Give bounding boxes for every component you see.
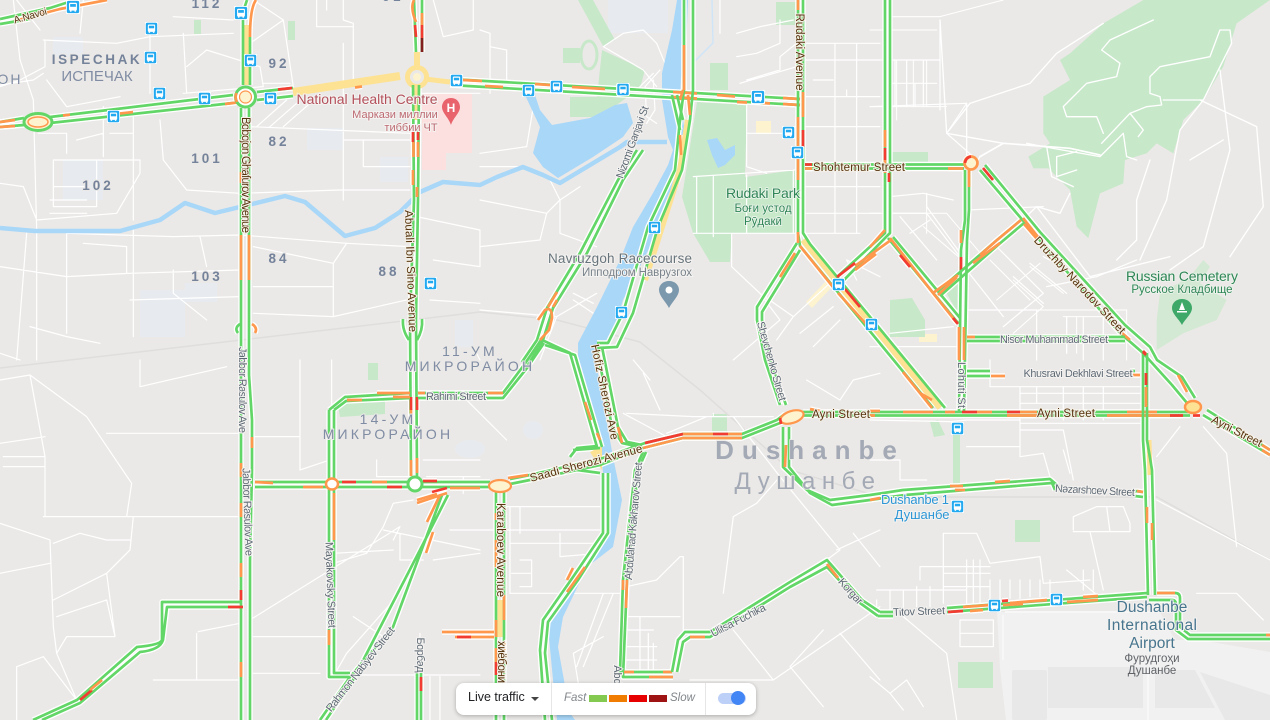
district labels: 11-УМ [442,343,498,359]
river Dushanbinka [548,0,688,720]
road: Hofiz river drive [597,0,693,348]
district labels [0,0,535,442]
road: cross diagonal [933,220,1024,296]
road: Jabbor Rasulov and Bobojon Ghafurov Avenue [236,0,256,720]
road name labels: Ayni Street [1037,408,1096,420]
district labels: МИКРОРАЙОН [323,425,453,442]
traffic mode dropdown: Live traffic [468,690,525,704]
road name labels: Korgar [835,576,865,607]
bus stop icons [66,0,1063,612]
road name labels: хиёбони [495,641,507,683]
road: central east-west arterial [450,79,800,105]
road: Abuali Ibn Sino Avenue [403,0,422,476]
district labels: МИКРОРАЙОН [405,357,535,374]
parks [194,0,1040,688]
road name labels: Abdulahad Kakharov Street [623,462,645,580]
road name labels: Titov Street [893,605,945,619]
road: Rahmon Nabiyev and ramp [320,488,448,720]
road name labels: Shevchenko Street [754,320,788,402]
point of interest: Dushanbe International Airport: Фурудгоҳи [1124,653,1180,665]
road: south-west link [33,602,243,720]
road name labels: Ayni Street [1209,414,1264,450]
point of interest: Rudaki Park: Rudaki Park [726,185,801,201]
road: Karaboev Avenue [496,492,504,720]
minor streets south-west [0,360,480,720]
road name labels: Ulitsa Fuchika [709,602,769,640]
point of interest: Dushanbe International Airport [1107,599,1197,677]
stadium track [581,41,597,69]
road name labels: Rahimi Street [426,391,486,403]
road name labels: Karaboev Avenue [494,503,506,597]
side stream [693,0,713,63]
road: Nizomi Ganjavi and Hofiz Sherozi [522,150,643,473]
traffic speed legend [552,683,706,715]
canal [0,142,667,236]
road: horizontal west of Saadi [255,481,490,488]
point of interest: Rudaki Park: Рӯдакӣ [744,216,782,228]
road: Shohtemur Street [805,164,964,168]
road: Nazarshoev Street [783,427,1143,505]
district labels: ISPECHAK [52,52,142,67]
point of interest: Navruzgoh Racecourse: Ипподром Наврузгох [582,267,692,279]
road: Abdulahad Kakharov Street [620,452,673,677]
district labels: 82 [268,134,290,149]
road name labels: Rahmon Nabiyev Street [324,625,398,714]
minor streets south-centre [450,360,880,707]
road name labels: Ayni Street [812,409,871,421]
point of interest: National Health Centre: Маркази миллии [352,109,438,121]
road name labels: Abuali Ibn Sino Avenue [402,210,418,332]
city label: Душанбе [735,468,881,495]
road: western arterial [0,86,362,130]
road: Rudaki Avenue [757,0,945,408]
road: Saadi Sherozi Avenue [508,414,787,484]
road name labels: Khusravi Dekhlavi Street [1024,368,1132,380]
traffic mode dropdown [456,683,552,715]
point of interest: Dushanbe International Airport: Dushanbe [1117,599,1187,616]
road: Ayni Street [803,409,1270,455]
road: Nisor Muhammad and Khusravi Dekhlavi [967,337,1140,376]
minor streets north-centre [480,0,880,360]
road name labels: Nazarshoev Street [1055,483,1135,499]
district labels: 84 [268,251,290,266]
road name labels: Mayakovsky Street [323,542,337,628]
railway [0,312,1270,560]
district labels: 14-УМ [360,411,416,427]
road: river west bank [540,473,608,720]
traffic toggle switch [718,693,746,704]
built-up patches [53,0,668,458]
live traffic control panel [456,683,756,715]
point of interest: Russian Cemetery: Russian Cemetery [1126,268,1238,284]
roundabouts [326,156,1201,492]
road name labels: Lohuti St [955,362,967,408]
pale yellow blocks [756,121,937,342]
hospital grounds [422,93,472,170]
road: Titov Street [878,593,1147,616]
point of interest: Dushanbe International Airport: International [1107,617,1197,634]
city label: Dushanbe [715,435,905,465]
road: Borbad south [417,632,494,720]
district labels: 102 [82,178,114,193]
minor streets north-west [0,0,480,360]
district labels: ИСПЕЧАК [61,68,133,85]
road name labels: Abd [611,665,623,685]
district labels: 103 [191,269,223,284]
road: Lohuti Street [959,170,969,412]
point of interest: National Health Centre: National Health Centre [296,91,438,107]
road: eastern vertical to airport [1143,352,1270,639]
point of interest: Russian Cemetery: Русское Кладбище [1131,284,1233,296]
road name labels: Nisor Muhammad Street [1000,334,1108,346]
traffic speed legend: Fast [564,692,586,704]
road name labels: Saadi Sherozi Avenue [529,443,644,485]
road: Druzhby Narodov Street [980,165,1195,403]
road name labels: Jabbor Rasulov Ave [236,347,248,433]
road name labels: Jabbor Rasulov Ave [239,468,255,556]
road name labels: Rudaki Avenue [793,14,805,90]
minor streets north-east [870,17,1137,360]
point of interest: Navruzgoh Racecourse: Navruzgoh Racecourse [548,251,692,266]
hillside forest [870,0,1270,360]
minor streets south-east [870,360,1270,720]
road name labels: Борбад [414,638,426,673]
district labels: 92 [268,56,290,71]
road: A. Navoi [0,0,107,24]
road name labels: Hofiz Sherozi Ave [588,344,620,441]
point of interest: Dushanbe 1 station: Dushanbe 1 [881,492,949,507]
yellow arterial roads [246,25,1150,637]
road name labels: Nizomi Ganjavi St [614,105,652,180]
park pond [707,138,735,168]
lake [525,95,633,178]
road name labels: A.Navoi [13,6,48,26]
point of interest: Rudaki Park: Боғи устод [734,203,792,215]
point of interest: National Health Centre: тиббии ЧТ [384,122,438,134]
road name labels: Druzhby Narodov Street [1031,235,1128,337]
district labels: 101 [191,151,223,166]
point of interest: Dushanbe International Airport: Душанбе [1128,665,1176,677]
point of interest: Dushanbe International Airport: Airport [1129,635,1176,652]
point of interest: Dushanbe 1 station: Душанбе [895,507,949,522]
road name labels: Shohtemur Street [813,162,906,174]
road: Rahimi and Mayakovsky [329,340,544,677]
traffic speed legend: Slow [670,692,695,704]
road: eastern avenue and north-east link [837,0,960,324]
point of interest: National Health Centre: H [447,101,455,115]
city label [715,435,905,495]
road name labels: Bobojon Ghafurov Avenue [239,117,251,233]
point of interest: Dushanbe 1 station [881,492,949,522]
point of interest: Russian Cemetery [1126,268,1238,325]
point of interest: National Health Centre [296,91,460,134]
airport grounds [997,612,1270,720]
district labels: 88 [378,264,400,279]
point of interest: Navruzgoh Racecourse [548,251,692,308]
road: Ulitsa Fuchika and Korgar [672,560,880,672]
point of interest: Rudaki Park [726,185,801,228]
